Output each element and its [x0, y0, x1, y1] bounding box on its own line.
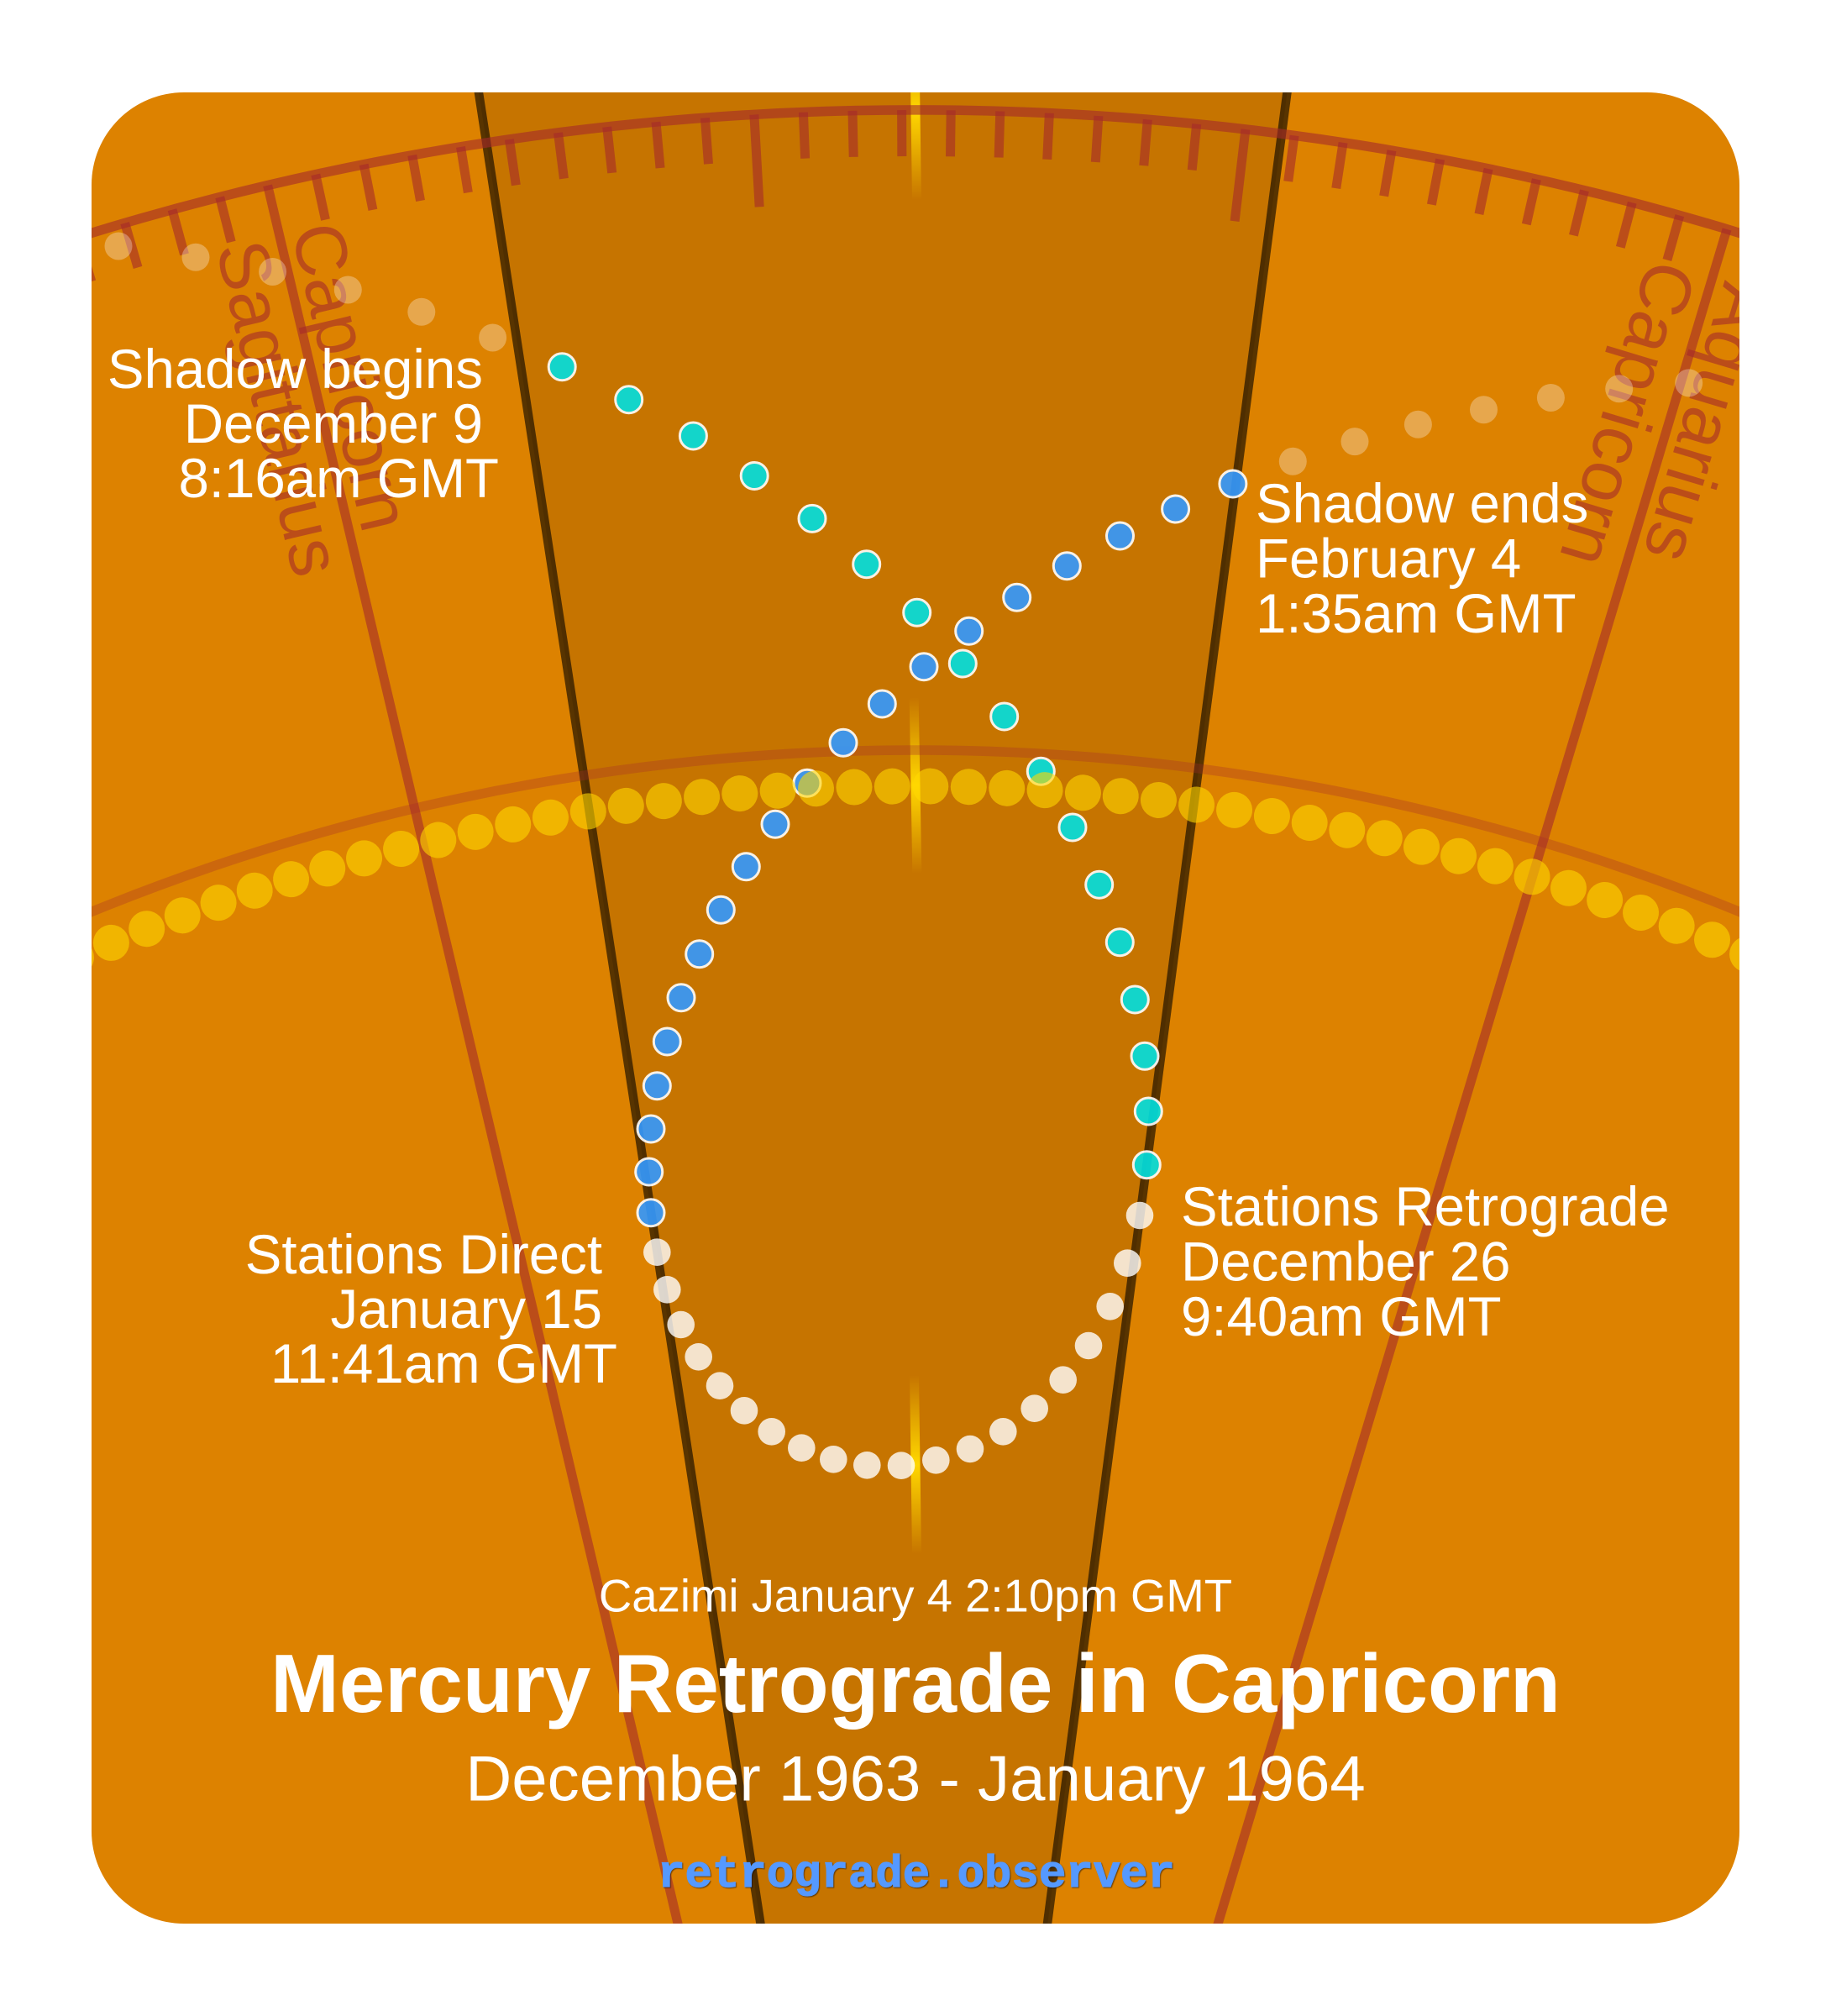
outer zodiac arc: [44, 110, 1787, 248]
Mercury positions leaving shadow (blue): [636, 470, 1246, 1226]
shadow end boundary line: [1047, 25, 1296, 1932]
callout: shadow ends: [1256, 473, 1588, 644]
cazimi marker middle: [910, 704, 921, 867]
sign label Sagittarius: Sagittarius: [201, 233, 357, 584]
Mercury positions after shadow: [1279, 369, 1702, 475]
callout: shadow ends: February 4: [1256, 528, 1521, 590]
callout: stations retrograde: [1181, 1176, 1670, 1347]
subtitle: dates: December 1963 - January 1964: [465, 1744, 1366, 1814]
Mercury positions entering shadow (teal): [548, 354, 1162, 1179]
retrograde shadow sector: [464, 0, 1299, 1932]
title: Mercury Retrograde in Capricorn: [270, 1637, 1561, 1730]
cazimi marker bottom: [910, 1383, 921, 1547]
Mercury positions while retrograde (cream): [643, 1202, 1153, 1479]
callout: stations retrograde: 9:40am GMT: [1181, 1286, 1502, 1347]
callout: shadow ends: Shadow ends: [1256, 473, 1588, 534]
callout: stations direct: [245, 1224, 617, 1394]
sign label Aquarius: Aquarius: [1628, 275, 1787, 571]
callout: cazimi: Cazimi January 4 2:10pm GMT: [599, 1571, 1232, 1621]
Sun daily positions: [52, 768, 1771, 981]
sign boundary Sagittarius / Capricorn: [268, 186, 680, 1935]
callout: stations retrograde: Stations Retrograde: [1181, 1176, 1670, 1237]
callout: stations direct: Stations Direct: [245, 1224, 602, 1285]
sign label Capricorn left: Capricorn: [275, 215, 426, 538]
callout: shadow ends: 1:35am GMT: [1256, 583, 1577, 644]
shadow begin boundary line: [470, 34, 763, 1935]
callout: stations retrograde: December 26: [1181, 1231, 1511, 1292]
sign label Capricorn right: Capricorn: [1544, 252, 1711, 575]
website credit: retrograde.observer: [658, 1850, 1175, 1901]
sign boundary Capricorn / Aquarius: [1210, 229, 1727, 1950]
callout: shadow begins: December 9: [184, 393, 483, 454]
cazimi marker top: [910, 92, 921, 193]
degree tick marks: [78, 110, 1680, 281]
callout: stations direct: January 15: [330, 1278, 602, 1340]
callout: shadow begins: 8:16am GMT: [178, 448, 499, 509]
callout: shadow begins: [108, 339, 499, 509]
inner ecliptic arc: [92, 745, 1739, 917]
callout: stations direct: 11:41am GMT: [270, 1333, 617, 1394]
callout: shadow begins: Shadow begins: [108, 339, 483, 400]
Mercury positions before shadow: [104, 232, 506, 351]
